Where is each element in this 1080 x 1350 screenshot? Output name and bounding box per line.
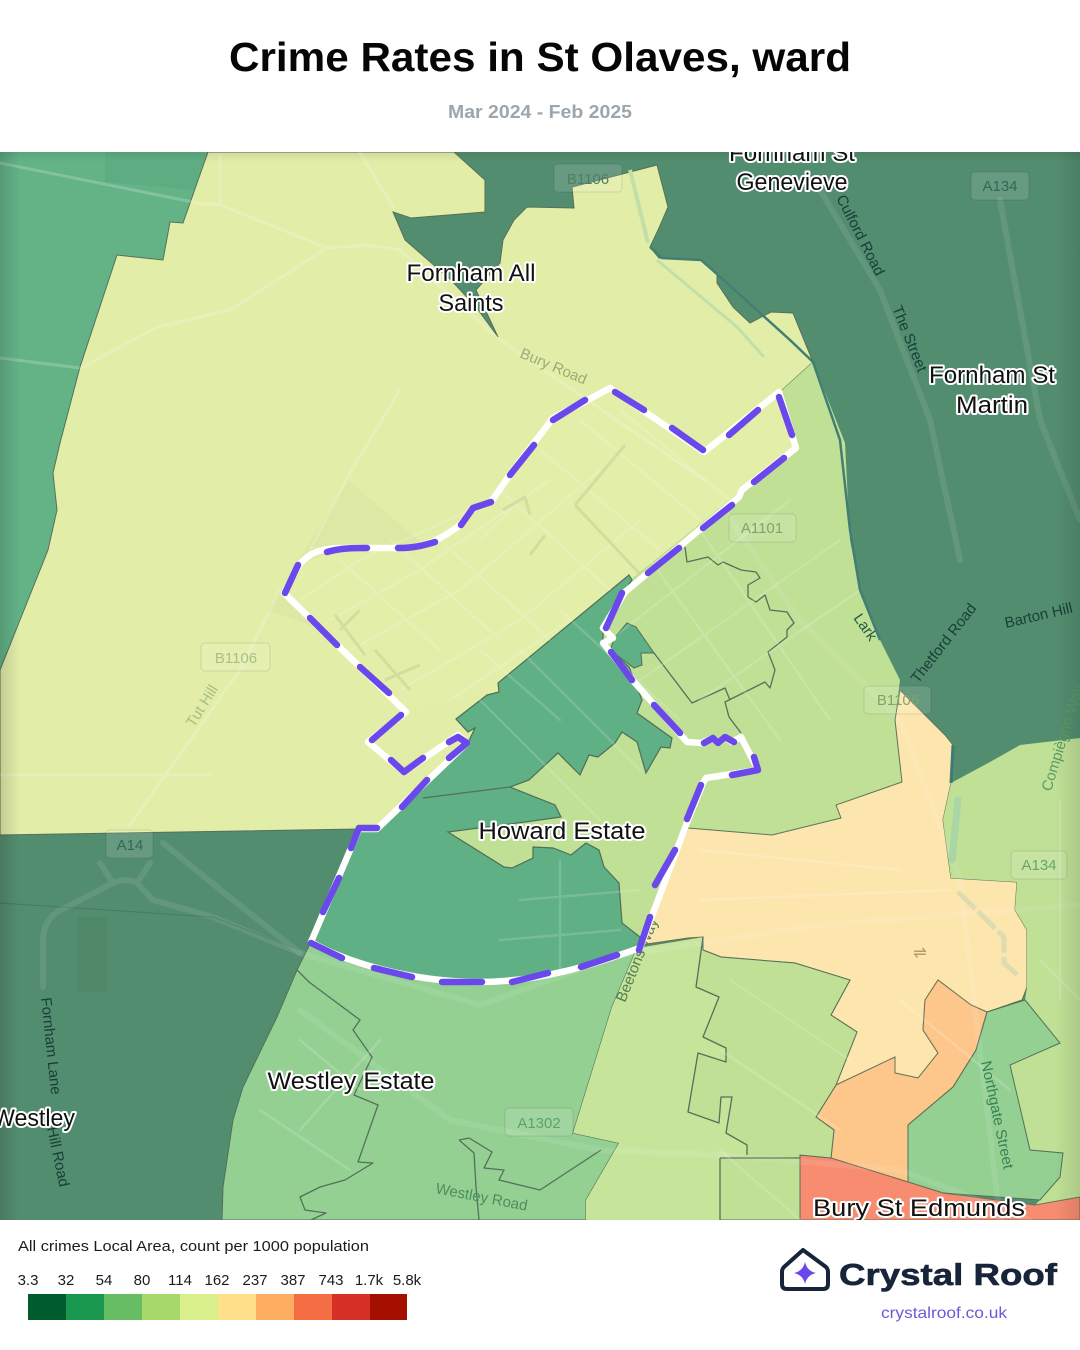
dark field and river shapes [78,917,107,992]
road badges: A134 [1021,857,1057,874]
road badges: B1106 [567,171,609,188]
area: red [800,1155,1080,1220]
wordmark: Crystal Roof [839,1257,1058,1292]
road badges: A1302 [517,1115,561,1132]
rail station icon: ⇌ [913,945,927,962]
place labels: Genevieve [736,169,848,196]
place labels: Westley Estate [268,1068,434,1095]
legend tick labels: 1.7k [355,1272,384,1289]
legend tick labels: 743 [318,1272,344,1289]
road name labels: Hill Road [43,1125,72,1188]
road name labels: Fornham Lane [37,997,64,1095]
legend colour scale [28,1294,407,1320]
area: bottom light green [573,937,857,1220]
road name labels: Bury Road [517,345,589,388]
legend tick labels: 5.8k [393,1272,422,1289]
edge shading [0,152,15,1220]
road name labels: Beetons Way [613,915,662,1004]
road name labels: Northgate Street [977,1059,1017,1171]
place labels: Fornham St [929,362,1055,389]
legend tick labels: 3.3 [18,1272,38,1289]
place labels: Martin [956,392,1028,419]
legend tick labels: 32 [58,1272,74,1289]
roads and paths [0,153,1080,1220]
legend tick labels: 162 [204,1272,230,1289]
area: orange [816,980,987,1182]
legend tick labels: 54 [96,1272,112,1289]
legend title: All crimes Local Area, count per 1000 population [18,1238,369,1255]
road name labels: Lark [850,611,881,645]
place labels: Fornham All [406,260,536,287]
logo: Crystal Roof [782,1250,1058,1322]
website: crystalroof.co.uk [881,1305,1008,1322]
faint housing blocks [335,445,655,690]
place labels: Bury St Edmunds [813,1195,1025,1222]
legend tick labels: 80 [134,1272,150,1289]
area: peach town centre [640,690,1027,1085]
area: Northgate green [908,1000,1063,1200]
place labels: Fornham St [729,140,855,167]
legend tick labels: 237 [242,1272,268,1289]
ward internal boundaries [297,547,800,1220]
place labels [0,140,1055,1222]
place labels: Howard Estate [478,818,646,845]
road name labels: Westley Road [434,1180,529,1215]
place labels: Saints [438,290,504,317]
road name labels: Thetford Road [908,600,980,686]
St Olaves ward boundary [284,388,796,982]
legend tick labels: 387 [280,1272,306,1289]
road badges [106,164,1067,1136]
area: low-crime green (St Olaves south) [311,575,672,982]
road badges: A134 [982,178,1018,195]
legend [18,1238,422,1320]
area: Westley green [222,942,637,1220]
road badges: B1106 [215,650,257,667]
road name labels: Culford Road [832,192,888,279]
area: left green [0,152,208,670]
area: light green central [440,362,902,945]
area: right light green [943,738,1080,1205]
road badges: A14 [117,837,143,854]
legend tick labels [18,1272,422,1289]
road name labels: The Street [888,303,931,375]
area: pale yellow-green Fornham ward [0,152,813,835]
legend tick labels: 114 [168,1272,192,1289]
road badges: A1101 [741,520,783,537]
river Lark [630,170,958,860]
road name labels: Barton Hill [1003,600,1074,632]
road badges: B1106 [877,692,919,709]
road name labels [37,192,1080,1215]
icon: house with star [782,1250,828,1289]
title: Crime Rates in St Olaves, ward [229,34,851,80]
subtitle: date range: Mar 2024 - Feb 2025 [448,102,632,122]
road name labels: Tut Hill [183,682,222,730]
